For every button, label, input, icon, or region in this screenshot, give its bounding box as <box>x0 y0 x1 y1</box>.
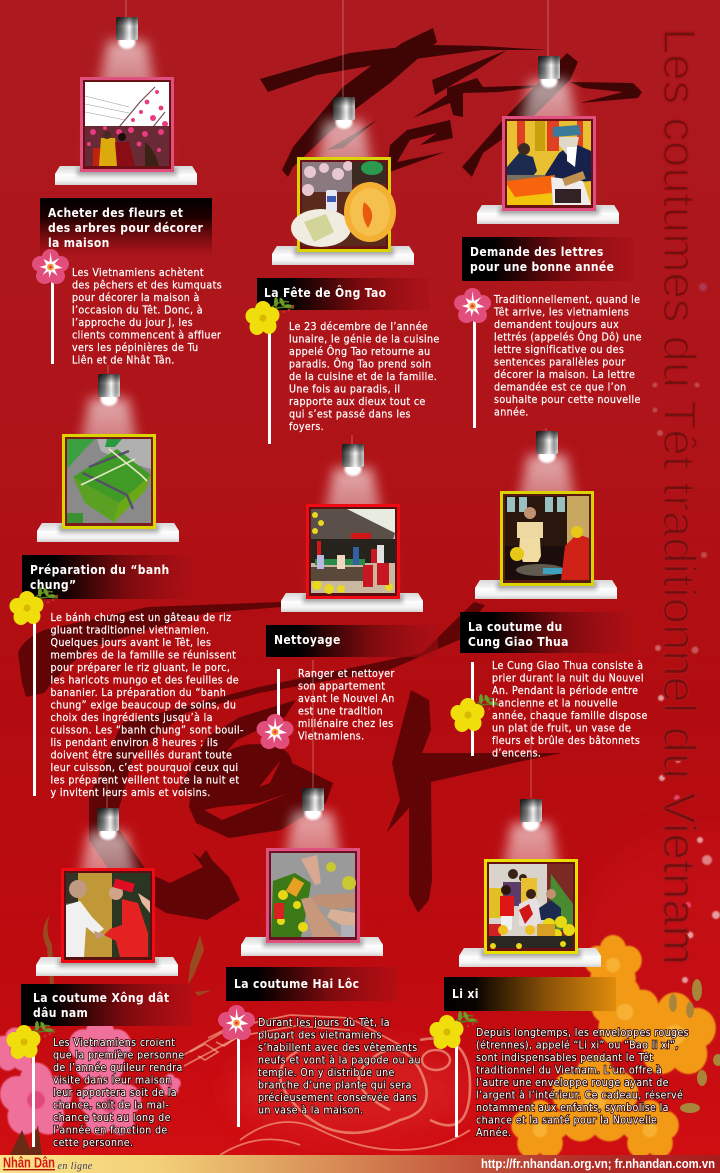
lamp and shelf <box>459 799 601 967</box>
icon: yellow flower <box>6 1021 55 1059</box>
body text: temple. On y distribue une <box>258 1067 395 1079</box>
photo: woman praying <box>502 492 592 584</box>
body text: chance et la santé pour la Nouvelle <box>476 1114 657 1126</box>
photo: flower market <box>82 78 172 170</box>
body text: Durant les jours du Têt, la <box>258 1017 390 1029</box>
body text: Traditionnellement, quand le <box>493 294 640 306</box>
heading: Cung Giao Thua <box>468 635 569 649</box>
body text: foyers. <box>289 421 324 433</box>
lamp and shelf <box>241 788 383 956</box>
body text: l’ancienne et la nouvelle <box>492 697 618 709</box>
body text: l’autre une enveloppe rouge ayant de <box>476 1077 669 1089</box>
body text: de la cuisine et de la famille. <box>289 371 437 383</box>
heading: Nettoyage <box>274 633 341 647</box>
body text: Le Cung Giao Thua consiste à <box>492 660 643 672</box>
body text: année. <box>494 406 529 418</box>
body text: Le bánh chưng est un gâteau de riz <box>50 612 231 624</box>
body text: pour préparer le riz gluant, le porc, <box>50 662 230 674</box>
body text: demandée est ce que l’on <box>494 381 627 393</box>
body text: leur cuisson, c’est pourquoi ceux qui <box>50 762 238 774</box>
body text: neufs et vont à la pagode ou au <box>258 1054 421 1066</box>
icon: pink flower <box>256 714 294 749</box>
body text: plupart des vietnamiens <box>258 1029 382 1041</box>
heading: Li xi <box>452 987 479 1001</box>
heading: La Fête de Ông Tao <box>264 285 386 300</box>
accent line <box>51 280 54 364</box>
lamp and shelf <box>477 56 619 224</box>
panel: Xong dat <box>6 808 193 1149</box>
accent line <box>237 1036 240 1127</box>
pink blossoms bottom left <box>0 915 212 1155</box>
accent line <box>455 1045 458 1137</box>
heading: pour une bonne année <box>470 260 614 274</box>
body text: millénaire chez les <box>298 718 394 730</box>
body text: que la première personne <box>53 1049 184 1061</box>
panel: letters <box>454 56 642 428</box>
icon: pink flower <box>32 249 69 284</box>
footer bar <box>0 1154 720 1173</box>
body text: chance, soit de la mal- <box>53 1099 169 1111</box>
accent line <box>471 662 474 756</box>
sparkles <box>652 283 720 983</box>
heading: La coutume du <box>468 620 563 634</box>
photo: house yard <box>308 506 398 598</box>
heading <box>460 612 632 653</box>
body text: Liên et de Nhât Tân. <box>72 354 175 366</box>
body text: prier durant la nuit du Nouvel <box>492 672 644 684</box>
body text: d’encens. <box>492 747 541 759</box>
body text: membres de la famille se réunissent <box>50 649 236 661</box>
heading <box>226 967 398 1001</box>
photo: family <box>486 860 576 952</box>
body text: visite dans leur maison <box>53 1074 172 1086</box>
heading: La coutume Xông dât <box>33 991 169 1005</box>
heading: Préparation du “banh <box>30 563 170 577</box>
body text: cuisson. Les “banh chung” sont bouil- <box>50 724 244 736</box>
panel: Cung Giao Thua <box>450 431 648 759</box>
icon: yellow flower <box>430 1011 478 1049</box>
accent line <box>473 318 476 428</box>
body text: son appartement <box>298 680 385 692</box>
icon: pink flower <box>218 1005 255 1040</box>
body text: rapporte aux dieux tout ce <box>289 396 426 408</box>
photo: hands on branch <box>268 850 358 942</box>
body text: gluant traditionnel vietnamien. <box>50 624 209 636</box>
body text: un plat de fruit, un vase de <box>492 722 631 734</box>
accent line <box>32 1055 35 1147</box>
icon: yellow flower <box>450 694 499 732</box>
body text: année, chaque famille dispose <box>492 710 648 722</box>
panel: Ong Tao <box>246 97 440 444</box>
heading <box>40 198 212 255</box>
panel: cleaning <box>256 444 438 749</box>
lamp and shelf <box>281 444 423 612</box>
title: vertical: Les coutumes du Têt traditionnel du Vietnam <box>654 28 705 965</box>
logo: Nhan Dan: en ligne <box>58 1161 93 1172</box>
lamp and shelf <box>272 97 414 265</box>
body text: pour décorer la maison à <box>72 292 200 304</box>
accent line <box>33 620 36 796</box>
body text: (étrennes), appelé “Li xi” ou “Bao li xi”, <box>476 1039 679 1051</box>
body text: l’occasion du Têt. Donc, à <box>72 304 203 316</box>
body text: Ranger et nettoyer <box>298 668 395 680</box>
body text: chance tout au long de <box>53 1112 171 1124</box>
body text: Année. <box>476 1127 511 1139</box>
heading: Acheter des fleurs et <box>48 206 183 220</box>
lamp and shelf <box>475 431 617 599</box>
heading <box>22 555 194 599</box>
body text: est une tradition <box>298 705 383 717</box>
icon: yellow flower <box>246 297 294 335</box>
body text: sentences parallèles pour <box>494 356 626 368</box>
body text: leur apportera soit de la <box>53 1087 177 1099</box>
body text: Le 23 décembre de l’année <box>289 321 428 333</box>
accent line <box>277 669 280 724</box>
body text: appelé Ông Tao retourne au <box>289 345 431 358</box>
body text: s’habillent avec des vêtements <box>258 1042 418 1054</box>
lamp and shelf <box>36 808 178 976</box>
panel: flowers and trees <box>32 17 222 366</box>
body text: lis pendant environ 8 heures : ils <box>50 737 218 749</box>
heading <box>257 278 429 310</box>
body text: l’approche du jour J, les <box>72 317 193 329</box>
body text: Vietnamiens. <box>298 730 364 742</box>
body text: y invitent leurs amis et voisins. <box>50 787 211 799</box>
body text: décorer la maison. La lettre <box>494 369 635 381</box>
body text: qui s’est passé dans les <box>289 408 411 420</box>
body text: Têt arrive, les vietnamiens <box>493 306 629 318</box>
photo: handshake <box>62 870 154 962</box>
heading <box>21 984 193 1026</box>
icon: pink flower <box>454 288 491 323</box>
body text: lettre significative ou des <box>494 344 624 356</box>
body text: choix des ingrédients jusqu’à la <box>50 712 213 724</box>
body text: doivent être surveillés durant toute <box>50 749 232 761</box>
lamp and shelf <box>37 374 179 542</box>
decorative bottom swirl pattern <box>175 1015 470 1155</box>
body text: branche d’une plante qui sera <box>258 1079 412 1091</box>
logo: Nhan Dan: Nhân Dân <box>3 1154 55 1172</box>
body text: lunaire, le génie de la cuisine <box>289 333 440 345</box>
body text: Depuis longtemps, les enveloppes rouges <box>476 1027 689 1039</box>
body text: chung” exige beaucoup de soins, du <box>50 699 236 711</box>
heading: La coutume Hai Lôc <box>234 977 359 991</box>
body text: un vase à la maison. <box>258 1104 363 1116</box>
body text: Les Vietnamiens achètent <box>72 267 204 279</box>
heading: la maison <box>48 236 110 250</box>
body text: demandent toujours aux <box>494 319 619 331</box>
body text: traditionnel du Vietnam. L’un offre à <box>476 1064 662 1076</box>
body text: les préparent veillent toute la nuit et <box>50 774 239 786</box>
body text: sont indispensables pendant le Têt <box>476 1052 653 1064</box>
body text: An. Pendant la période entre <box>492 685 638 697</box>
photo: offering table <box>291 158 396 250</box>
body text: clients commencent à affluer <box>72 329 221 341</box>
body text: Quelques jours avant le Têt, les <box>50 637 211 649</box>
body text: l’année en fonction de <box>53 1124 168 1136</box>
panel: Li xi <box>430 799 689 1139</box>
orange blossoms bottom right <box>511 935 720 1158</box>
photo: banh chung <box>64 436 154 528</box>
body text: bananier. La préparation du “banh <box>50 687 226 699</box>
body text: des pêchers et des kumquats <box>72 279 222 291</box>
heading: des arbres pour décorer <box>48 221 204 235</box>
body text: lettrés (appelés Ông Dô) une <box>494 330 642 343</box>
heading: dâu nam <box>33 1006 88 1020</box>
body text: cette personne. <box>53 1137 133 1149</box>
body text: paradis. Ông Tao prend soin <box>289 357 431 370</box>
panel: Hai Loc <box>218 788 421 1127</box>
calligraphy: lower character <box>18 602 562 920</box>
body text: de l’année quileur rendra <box>53 1062 183 1074</box>
body text: avant le Nouvel An <box>298 693 395 705</box>
photo: calligrapher <box>504 118 594 210</box>
heading <box>444 977 616 1011</box>
body text: fleurs et brûle des bâtonnets <box>492 735 640 747</box>
heading <box>266 625 438 657</box>
body text: souhaite pour cette nouvelle <box>494 394 641 406</box>
body text: Une fois au paradis, il <box>289 383 400 395</box>
body text: Les Vietnamiens croient <box>53 1037 175 1049</box>
heading <box>462 237 634 281</box>
body text: notamment aux enfants, symbolise la <box>476 1102 669 1114</box>
heading: chung” <box>30 578 76 592</box>
body text: précieusement conservée dans <box>258 1092 417 1104</box>
body text: les haricots mungo et des feuilles de <box>50 674 239 686</box>
accent line <box>268 330 271 444</box>
body text: vers les pépinières de Tu <box>72 342 199 354</box>
heading: Demande des lettres <box>470 245 604 259</box>
icon: yellow flower <box>10 587 58 625</box>
panel: banh chung <box>10 374 244 799</box>
body text: l’argent à l’intérieur. Ce cadeau, réservé <box>476 1089 683 1101</box>
calligraphy: Tet top <box>260 28 642 177</box>
lamp and shelf <box>55 17 197 185</box>
lamp cords <box>107 0 548 808</box>
